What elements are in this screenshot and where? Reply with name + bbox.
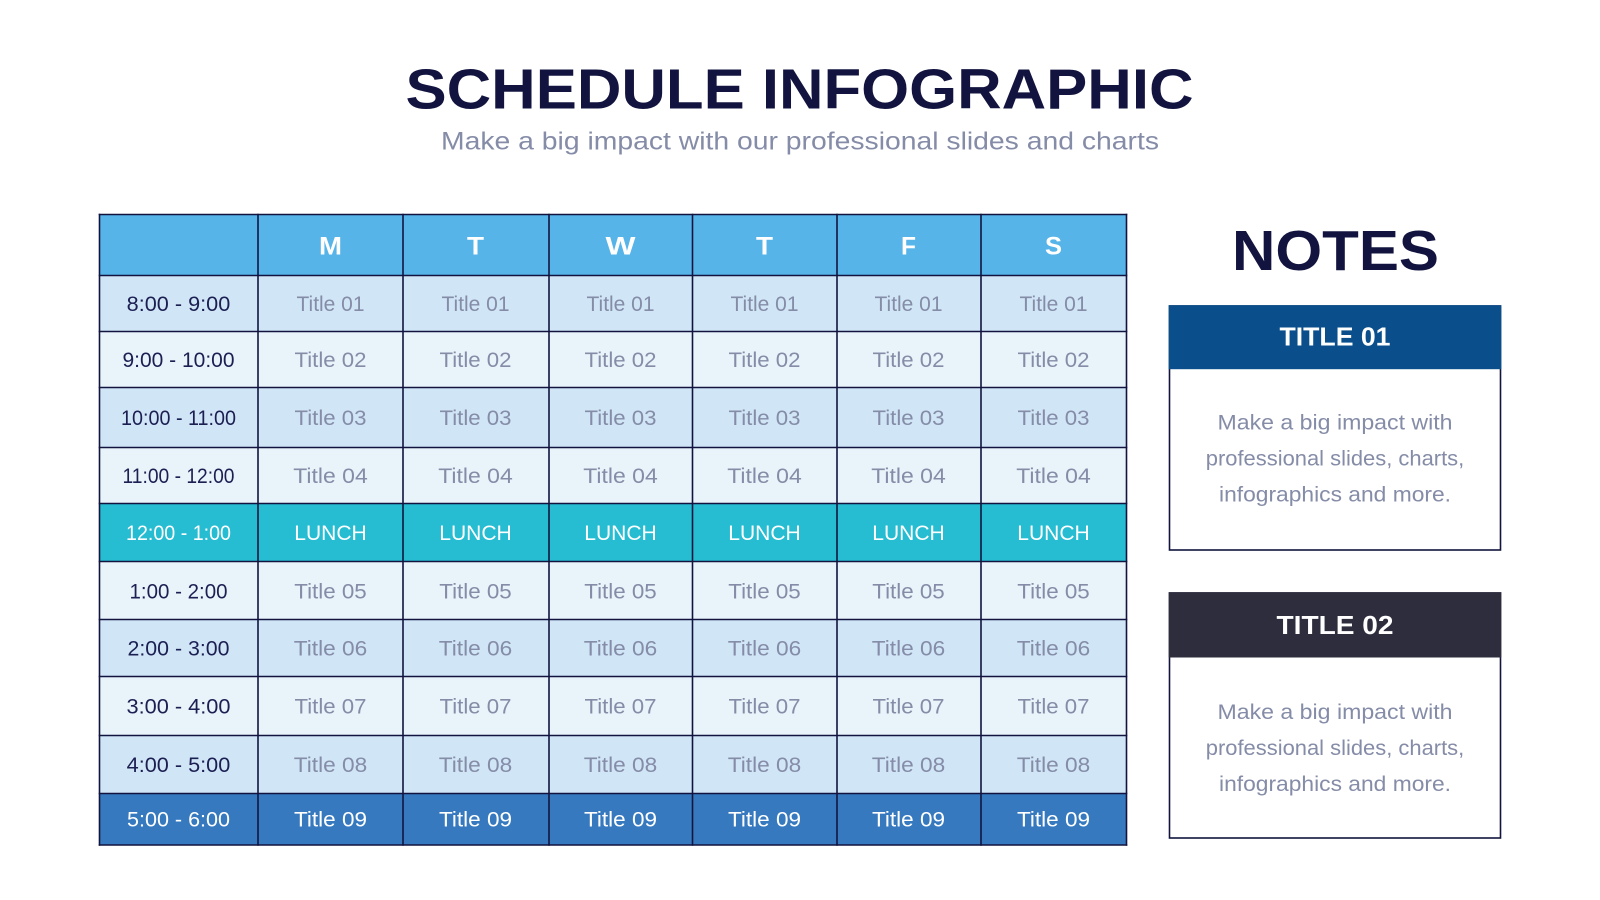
row: 1:00 - 2:00 (100, 562, 1126, 620)
row: 2:00 - 3:00: Title 06 (439, 637, 512, 661)
title: SCHEDULE INFOGRAPHIC (406, 58, 1194, 122)
panel body text: professional slides, charts, (1206, 737, 1464, 760)
row: 4:00 - 5:00: Title 08 (584, 753, 657, 777)
row: 1:00 - 2:00: Title 05 (439, 579, 512, 603)
row: 9:00 - 10:00: Title 02 (728, 348, 800, 372)
row: 3:00 - 4:00: Title 07 (1018, 694, 1090, 718)
row: lunch 12:00 - 1:00: LUNCH (584, 521, 657, 545)
row: 11:00 - 12:00: Title 04 (1016, 464, 1091, 488)
row: 3:00 - 4:00 (100, 676, 1126, 736)
row: 1:00 - 2:00: Title 05 (584, 579, 657, 603)
row: 10:00 - 11:00: Title 03 (294, 406, 367, 430)
row: 9:00 - 10:00: Title 02 (584, 348, 656, 372)
row: 5:00 - 6:00: Title 09 (294, 807, 367, 831)
header row: days of week: T (756, 232, 773, 260)
row: 10:00 - 11:00: Title 03 (1018, 406, 1090, 430)
row: 8:00 - 9:00: Title 01 (730, 292, 798, 316)
header row: days of week: S (1045, 232, 1062, 260)
panel header: title 02 (1169, 592, 1501, 658)
row: 9:00 - 10:00: Title 02 (872, 348, 944, 372)
row: 2:00 - 3:00: 2:00 - 3:00 (128, 637, 230, 661)
panel body text (1206, 701, 1464, 796)
row: 5:00 - 6:00: Title 09 (1017, 807, 1090, 831)
row: 10:00 - 11:00: Title 03 (440, 406, 512, 430)
row: 3:00 - 4:00: Title 07 (584, 694, 656, 718)
row: 5:00 - 6:00: Title 09 (584, 807, 657, 831)
row: 10:00 - 11:00: Title 03 (872, 406, 945, 430)
panel body text (1206, 411, 1464, 507)
row: 2:00 - 3:00: Title 06 (294, 637, 367, 661)
subtitle: Make a big impact with our professional slides and charts (441, 128, 1159, 156)
row: 2:00 - 3:00: Title 06 (1017, 637, 1090, 661)
row: 9:00 - 10:00: Title 02 (294, 348, 366, 372)
row: 10:00 - 11:00: Title 03 (728, 406, 801, 430)
row: 1:00 - 2:00: Title 05 (294, 579, 367, 603)
row: 4:00 - 5:00: 4:00 - 5:00 (127, 753, 230, 777)
row: 5:00 - 6:00 (100, 794, 1126, 845)
row: 3:00 - 4:00: Title 07 (728, 694, 800, 718)
row: 5:00 - 6:00: 5:00 - 6:00 (127, 807, 230, 831)
panel body text: Make a big impact with (1218, 701, 1452, 724)
row: 8:00 - 9:00 (100, 276, 1126, 332)
row: 1:00 - 2:00: 1:00 - 2:00 (130, 579, 228, 603)
panel header: title 02: TITLE 02 (1276, 610, 1394, 640)
panel: title 02 (1169, 592, 1501, 838)
row: 8:00 - 9:00: Title 01 (586, 292, 654, 316)
row: 10:00 - 11:00 (100, 388, 1126, 448)
row: 2:00 - 3:00: Title 06 (872, 637, 945, 661)
header row: days of week: W (606, 232, 636, 260)
row: 4:00 - 5:00: Title 08 (294, 753, 367, 777)
header row: days of week: T (467, 232, 484, 260)
panel header: title 01 (1169, 305, 1501, 369)
row: 8:00 - 9:00: Title 01 (442, 292, 510, 316)
row: 3:00 - 4:00: Title 07 (440, 694, 512, 718)
row: lunch 12:00 - 1:00: LUNCH (294, 521, 367, 545)
row: 3:00 - 4:00: 3:00 - 4:00 (126, 694, 231, 718)
row: 1:00 - 2:00: Title 05 (728, 579, 801, 603)
panel body text: infographics and more. (1219, 773, 1451, 796)
row: lunch 12:00 - 1:00 (100, 504, 1126, 562)
row: 11:00 - 12:00: Title 04 (438, 464, 513, 488)
row: 1:00 - 2:00: Title 05 (1017, 579, 1090, 603)
row: lunch 12:00 - 1:00: LUNCH (872, 521, 945, 545)
row: 8:00 - 9:00: 8:00 - 9:00 (127, 292, 230, 316)
row: 4:00 - 5:00: Title 08 (1017, 753, 1090, 777)
row: lunch 12:00 - 1:00: LUNCH (1017, 521, 1090, 545)
row: 8:00 - 9:00: Title 01 (874, 292, 942, 316)
panel: title 01 (1169, 305, 1501, 550)
row: 11:00 - 12:00: Title 04 (293, 464, 368, 488)
row: 2:00 - 3:00: Title 06 (728, 637, 801, 661)
row: 5:00 - 6:00: Title 09 (439, 807, 512, 831)
notes heading: NOTES (1232, 219, 1439, 283)
row: 11:00 - 12:00: Title 04 (727, 464, 802, 488)
row: 10:00 - 11:00: 10:00 - 11:00 (121, 406, 236, 430)
row: 4:00 - 5:00: Title 08 (728, 753, 801, 777)
row: 5:00 - 6:00: Title 09 (872, 807, 945, 831)
row: 11:00 - 12:00: 11:00 - 12:00 (122, 464, 235, 488)
row: 9:00 - 10:00 (100, 332, 1126, 388)
row: lunch 12:00 - 1:00: 12:00 - 1:00 (126, 521, 231, 545)
header row: days of week: F (901, 232, 916, 260)
row: 11:00 - 12:00 (100, 448, 1126, 504)
row: 9:00 - 10:00: 9:00 - 10:00 (122, 348, 235, 372)
header row: days of week (100, 214, 1126, 276)
row: 10:00 - 11:00: Title 03 (584, 406, 657, 430)
row: 5:00 - 6:00: Title 09 (728, 807, 801, 831)
row: 3:00 - 4:00: Title 07 (294, 694, 366, 718)
row: lunch 12:00 - 1:00: LUNCH (728, 521, 801, 545)
row: 9:00 - 10:00: Title 02 (440, 348, 512, 372)
panel body text: professional slides, charts, (1206, 448, 1464, 470)
panel header: title 01: TITLE 01 (1280, 322, 1390, 352)
row: 8:00 - 9:00: Title 01 (1020, 292, 1088, 316)
row: 4:00 - 5:00: Title 08 (439, 753, 512, 777)
schedule table (99, 214, 1127, 846)
row: lunch 12:00 - 1:00: LUNCH (439, 521, 512, 545)
row: 2:00 - 3:00: Title 06 (584, 637, 657, 661)
row: 3:00 - 4:00: Title 07 (872, 694, 944, 718)
panel body text: Make a big impact with (1218, 411, 1452, 434)
row: 4:00 - 5:00: Title 08 (872, 753, 945, 777)
panel body text: infographics and more. (1219, 484, 1451, 507)
row: 4:00 - 5:00 (100, 736, 1126, 794)
header row: days of week: M (319, 232, 342, 260)
row: 11:00 - 12:00: Title 04 (583, 464, 658, 488)
row: 2:00 - 3:00 (100, 620, 1126, 676)
row: 11:00 - 12:00: Title 04 (871, 464, 946, 488)
row: 9:00 - 10:00: Title 02 (1018, 348, 1090, 372)
row: 1:00 - 2:00: Title 05 (872, 579, 945, 603)
row: 8:00 - 9:00: Title 01 (296, 292, 364, 316)
